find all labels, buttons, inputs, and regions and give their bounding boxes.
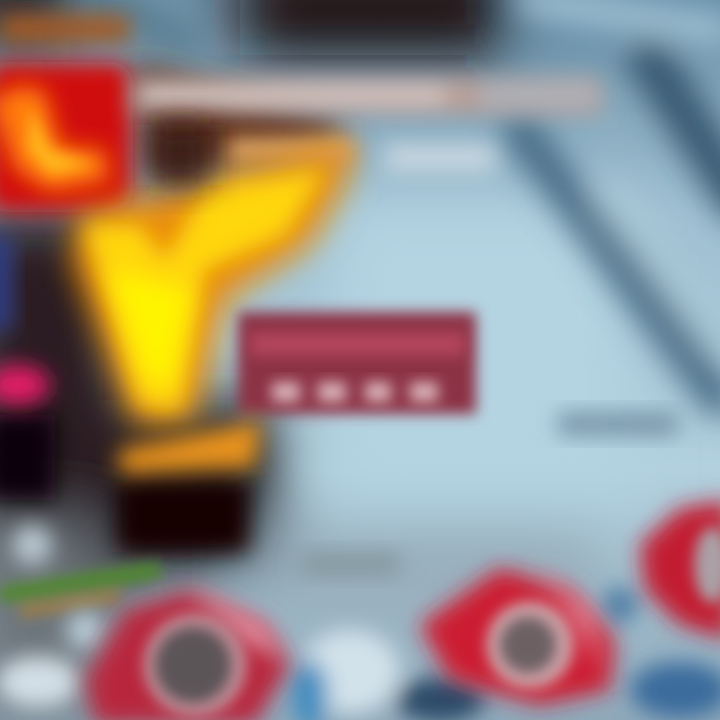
pills [0,525,720,720]
footer label [300,552,400,576]
pink accent [0,365,50,405]
icon: box base [118,420,262,552]
side label [558,412,678,436]
subtitle [225,138,495,172]
dark block [0,415,55,500]
blue accent [0,235,12,330]
capsule: right [640,500,720,640]
capsule: centre [420,565,615,705]
capsule: left [85,585,290,720]
callout text bars [272,382,438,402]
rainbow strip [0,570,160,612]
top band [0,15,130,43]
callout: red panel [238,312,476,414]
chart: flame V shape [72,125,350,425]
title bar [132,78,602,114]
icon: red badge with flame [0,62,133,212]
